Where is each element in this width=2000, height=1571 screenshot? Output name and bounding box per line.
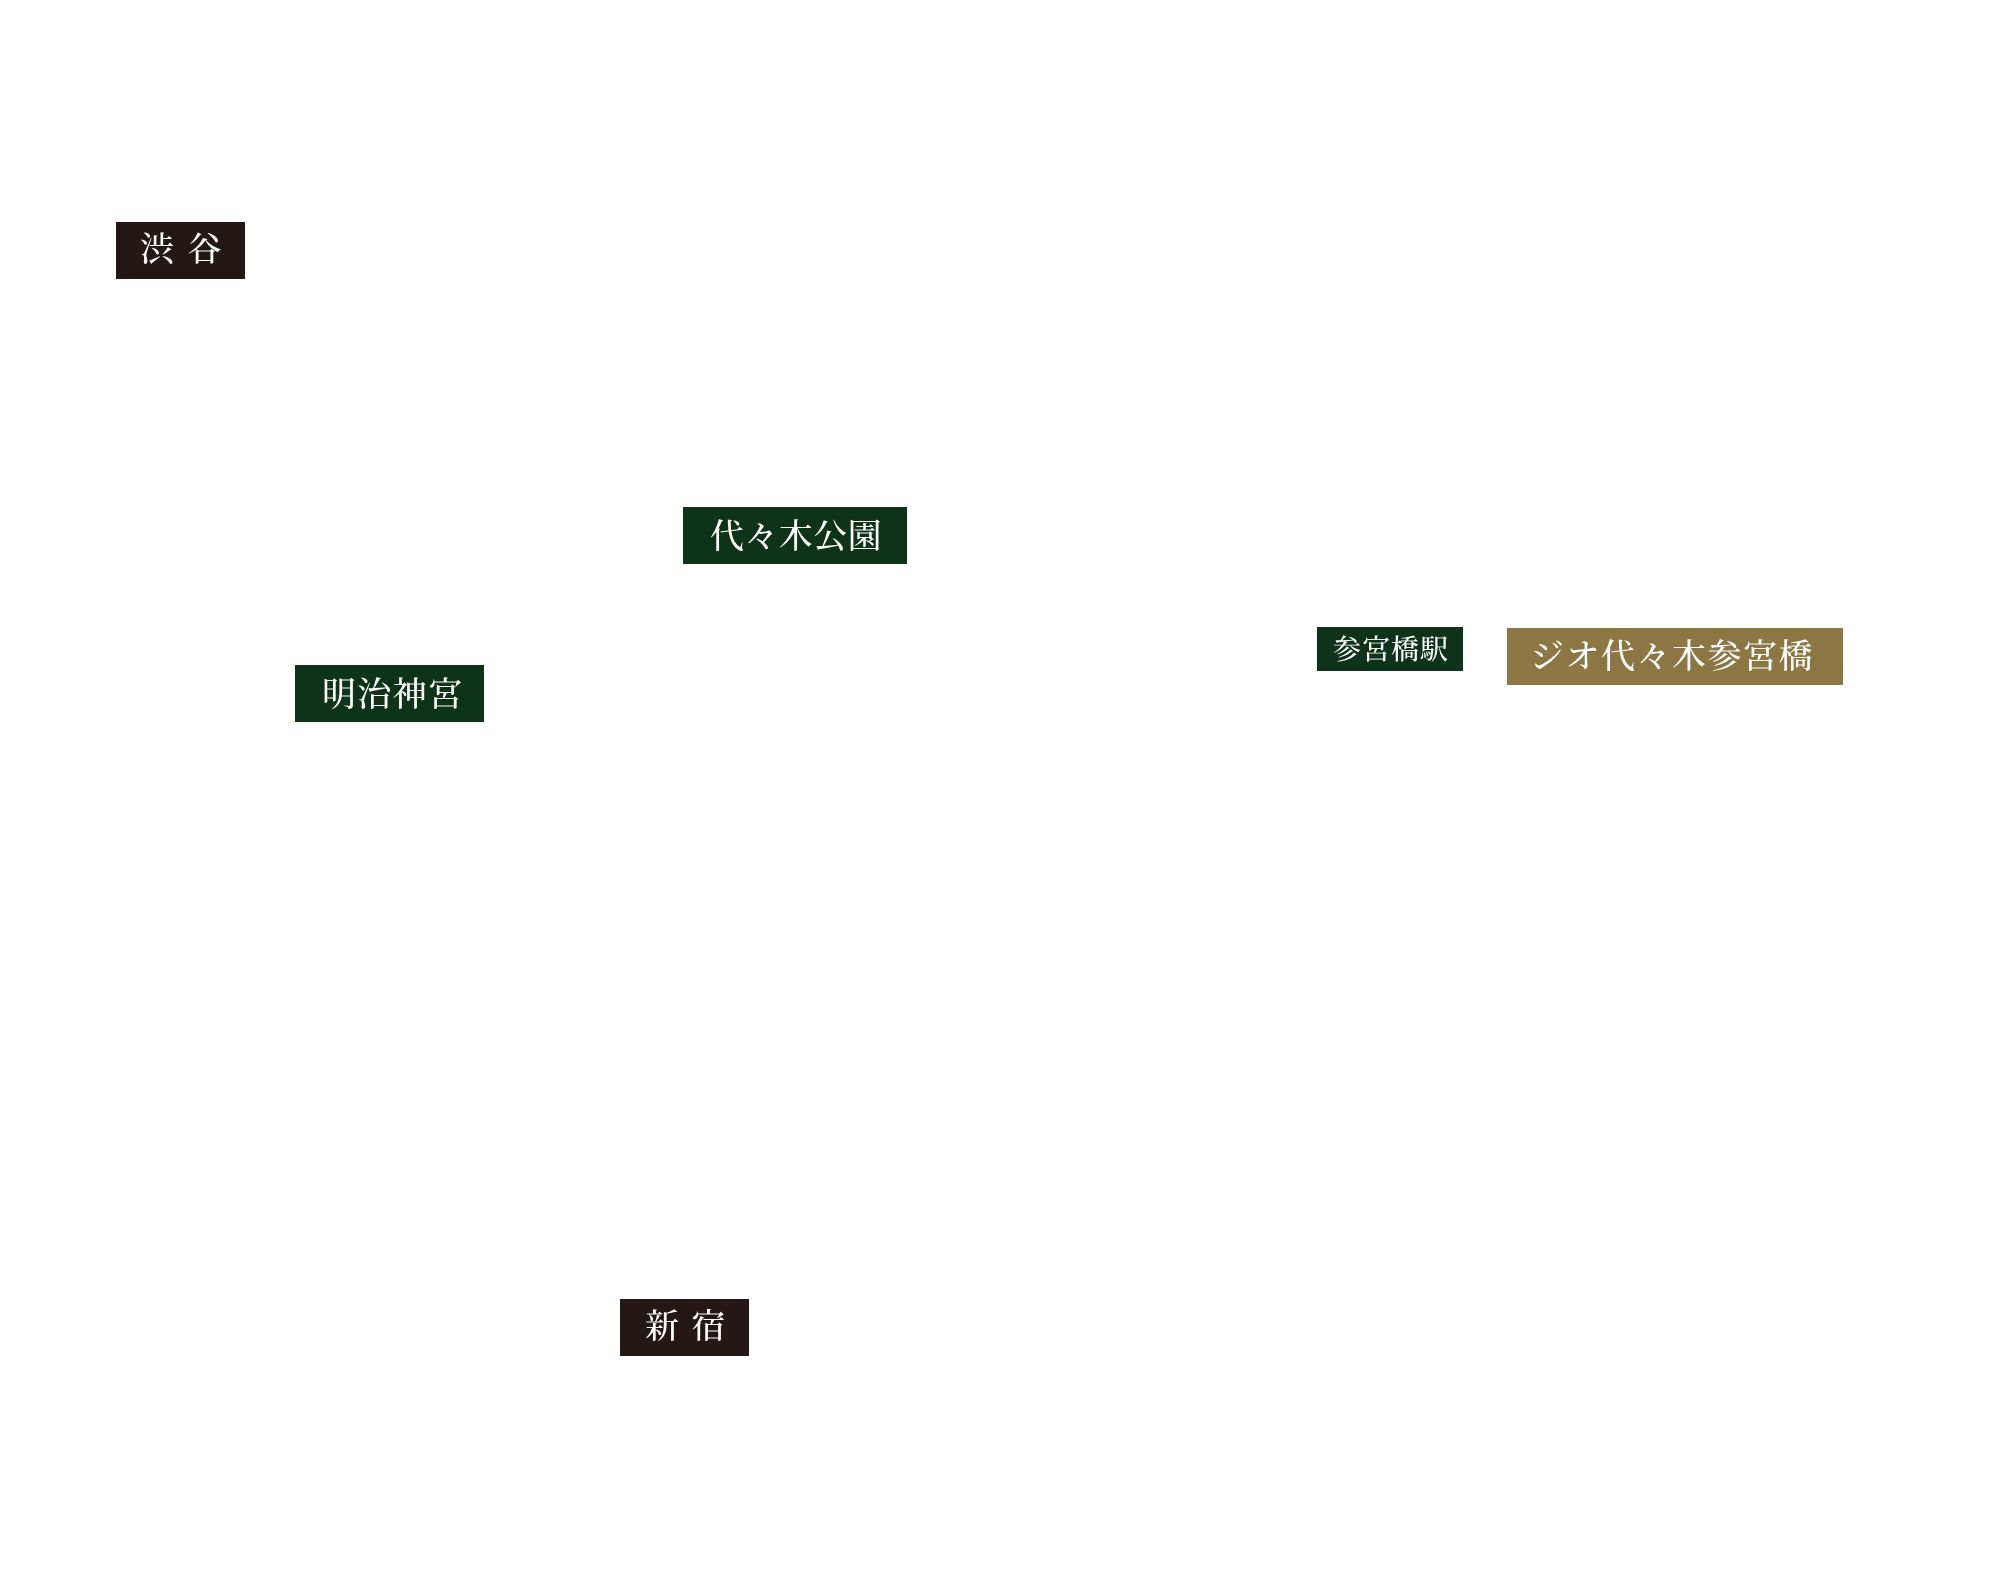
- label: Meiji Jingu: [295, 665, 484, 722]
- label: Yoyogi Park: 代々木公園: [710, 519, 882, 556]
- label: Meiji Jingu: 明治神宮: [322, 677, 464, 714]
- label: Shibuya: 渋谷: [140, 232, 235, 269]
- label: Shinjuku: [620, 1299, 749, 1356]
- label: Sangubashi Station: 参宮橋駅: [1333, 635, 1449, 666]
- label: Yoyogi Park: [683, 507, 907, 564]
- label: Geo Yoyogi Sangubashi: [1507, 628, 1843, 685]
- label: Shinjuku: 新宿: [645, 1309, 738, 1346]
- label: Shibuya: [116, 222, 245, 278]
- label: Geo Yoyogi Sangubashi: ジオ代々木参宮橋: [1530, 639, 1814, 676]
- label: Sangubashi Station: [1317, 627, 1463, 671]
